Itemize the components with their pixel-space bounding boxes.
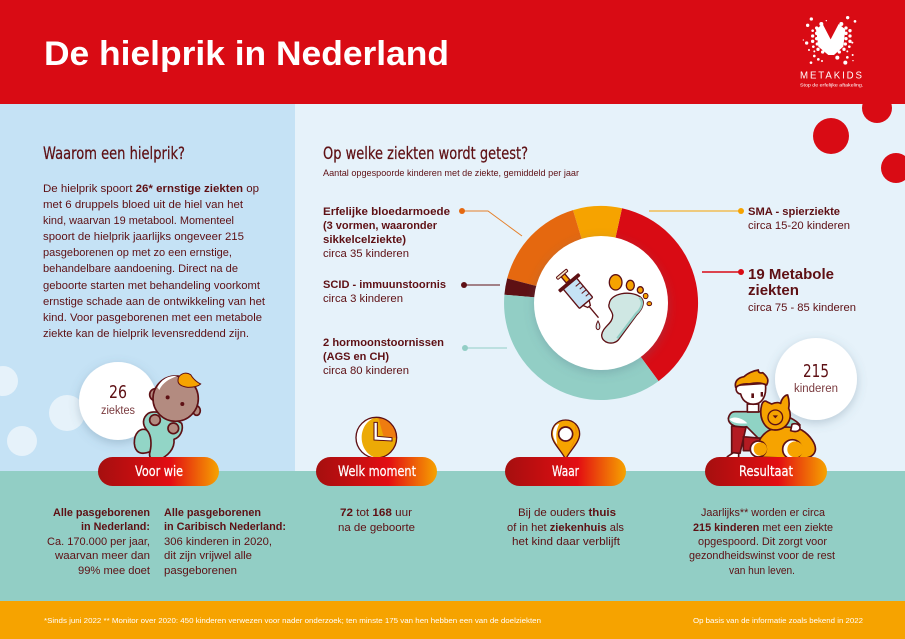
decorative red circles <box>813 93 905 183</box>
callout: 26 ziektes <box>79 362 157 440</box>
panel: footer band <box>0 601 905 639</box>
text block: intro <box>43 183 266 340</box>
label: metabole ziekten: 19 Metabole <box>748 267 834 283</box>
title: De hielprik in Nederland <box>44 35 449 73</box>
connector: SMA <box>649 208 744 214</box>
pill: Waar: Waar <box>552 464 579 480</box>
callout: 26 ziektes: 26 <box>109 382 127 403</box>
text block: intro: kind, waarvan 19 metabool. Momenteel <box>43 215 234 227</box>
text: voor wie Nederland <box>47 507 151 577</box>
subheading: Aantal opgespoorde kinderen met de ziekte, gemiddeld per jaar <box>323 168 579 178</box>
text: waar: of in het ziekenhuis als <box>507 522 624 534</box>
connector: bloedarmoede <box>459 208 522 236</box>
text: resultaat: gezondheidswinst voor de rest <box>689 550 836 562</box>
callout: 215 kinderen: 215 <box>803 361 829 382</box>
text block: intro: met 6 druppels bloed uit de hiel van het <box>43 199 244 211</box>
callout: 215 kinderen: kinderen <box>794 383 838 395</box>
callout: 215 kinderen <box>775 338 857 420</box>
decorative pale bubbles <box>0 366 85 456</box>
text: voor wie Caribisch Nederland <box>164 507 286 577</box>
label: SCID: SCID - immuunstoornis <box>323 279 446 291</box>
source note: Op basis van de informatie zoals bekend in 2022 <box>693 616 863 625</box>
text: resultaat: van hun leven. <box>729 565 795 577</box>
label: SCID <box>323 279 446 305</box>
footnote: *Sinds juni 2022 ** Monitor over 2020: 450 kinderen verwezen voor nader onderzoek; ten minste 175 van hen hebben een van de doelziekten <box>44 616 541 625</box>
icon: syringe and foot <box>551 265 652 343</box>
text: waar <box>507 507 624 548</box>
pill: Resultaat <box>705 457 827 486</box>
pill: Welk moment <box>316 457 437 486</box>
panel: teal band <box>0 471 905 601</box>
donut chart <box>504 206 698 400</box>
text: welk moment <box>338 507 415 534</box>
text block: intro: ernstige schade aan de ontwikkeling van het <box>43 296 266 308</box>
pill: Voor wie <box>98 457 219 486</box>
text: welk moment: 72 tot 168 uur <box>340 507 412 519</box>
label: hormoonstoornissen: (AGS en CH) <box>323 351 389 363</box>
connector: hormoonstoornissen <box>462 345 507 351</box>
text block: intro: pasgeborenen op met zo een ernstige, <box>43 247 232 259</box>
label: erfelijke bloedarmoede <box>323 206 450 260</box>
logo: Metakids: METAKIDS <box>800 71 862 82</box>
icon: map pin <box>552 420 580 459</box>
text: waar: het kind daar verblijft <box>512 536 621 548</box>
text block: intro: geboorte starten met behandeling voorkomt <box>43 280 261 292</box>
connector: SCID <box>461 282 500 288</box>
pill: Voor wie: Voor wie <box>135 464 183 480</box>
text block: intro: ziekte kan de hielprik levensreddend zijn. <box>43 328 249 340</box>
label: metabole ziekten <box>748 267 856 314</box>
text block: intro: behandelbare aandoening. Direct na de <box>43 263 238 275</box>
connector: metabole ziekten <box>702 269 744 275</box>
illustration: baby <box>134 373 201 461</box>
text: voor wie Nederland: Alle pasgeborenen <box>53 507 150 519</box>
text: resultaat: 215 kinderen met een ziekte <box>693 522 833 534</box>
label: hormoonstoornissen <box>323 337 444 377</box>
text: voor wie Nederland: waarvan meer dan <box>54 550 150 562</box>
pill: Waar <box>505 457 626 486</box>
text: voor wie Nederland: Ca. 170.000 per jaar, <box>47 536 150 548</box>
label: hormoonstoornissen: 2 hormoonstoornissen <box>323 337 444 349</box>
text: resultaat <box>689 507 836 577</box>
text: voor wie Caribisch Nederland: pasgeborenen <box>164 565 237 577</box>
label: SMA <box>748 206 850 232</box>
text: voor wie Caribisch Nederland: dit zijn vrijwel alle <box>164 550 252 562</box>
heading: Waarom een hielprik?: Waarom een hielprik? <box>43 144 185 164</box>
text block: intro: De hielprik spoort 26* ernstige ziekten op <box>43 183 259 195</box>
label: SCID: circa 3 kinderen <box>323 293 403 305</box>
pill: Welk moment: Welk moment <box>338 464 416 480</box>
label: erfelijke bloedarmoede: circa 35 kinderen <box>323 248 409 260</box>
label: SMA: SMA - spierziekte <box>748 206 840 218</box>
callout: 26 ziektes: ziektes <box>101 405 135 417</box>
text: welk moment: na de geboorte <box>338 522 415 534</box>
label: erfelijke bloedarmoede: sikkelcelziekte) <box>323 234 406 246</box>
text: waar: Bij de ouders thuis <box>518 507 616 519</box>
heading: Op welke ziekten wordt getest?: Op welke ziekten wordt getest? <box>323 144 528 164</box>
text: voor wie Caribisch Nederland: Alle pasgeborenen <box>164 507 261 519</box>
label: erfelijke bloedarmoede: Erfelijke bloedarmoede <box>323 206 450 218</box>
panel: left background <box>0 104 295 472</box>
label: SMA: circa 15-20 kinderen <box>748 220 850 232</box>
text: voor wie Nederland: in Nederland: <box>81 521 150 533</box>
label: metabole ziekten: ziekten <box>748 283 799 299</box>
donut centre circle <box>534 236 668 370</box>
text: resultaat: Jaarlijks** worden er circa <box>701 507 826 519</box>
label: erfelijke bloedarmoede: (3 vormen, waaronder <box>323 220 438 232</box>
panel: header band <box>0 0 905 104</box>
logo: Metakids: Stop de erfelijke aftakeling. <box>800 83 863 89</box>
text: resultaat: opgespoord. Dit zorgt voor <box>698 536 827 548</box>
icon: clock <box>356 417 397 458</box>
label: hormoonstoornissen: circa 80 kinderen <box>323 365 409 377</box>
illustration: boy with teddy bear <box>727 370 815 459</box>
text: voor wie Caribisch Nederland: in Caribisch Nederland: <box>164 521 286 533</box>
text: voor wie Caribisch Nederland: 306 kinderen in 2020, <box>164 536 272 548</box>
label: metabole ziekten: circa 75 - 85 kinderen <box>748 302 856 314</box>
pill: Resultaat: Resultaat <box>739 464 793 480</box>
logo: Metakids <box>800 16 863 89</box>
text block: intro: spoort de hielprik jaarlijks ongeveer 215 <box>43 231 244 243</box>
text: voor wie Nederland: 99% mee doet <box>78 565 151 577</box>
text block: intro: kind. Voor pasgeborenen met een metabole <box>43 312 262 324</box>
